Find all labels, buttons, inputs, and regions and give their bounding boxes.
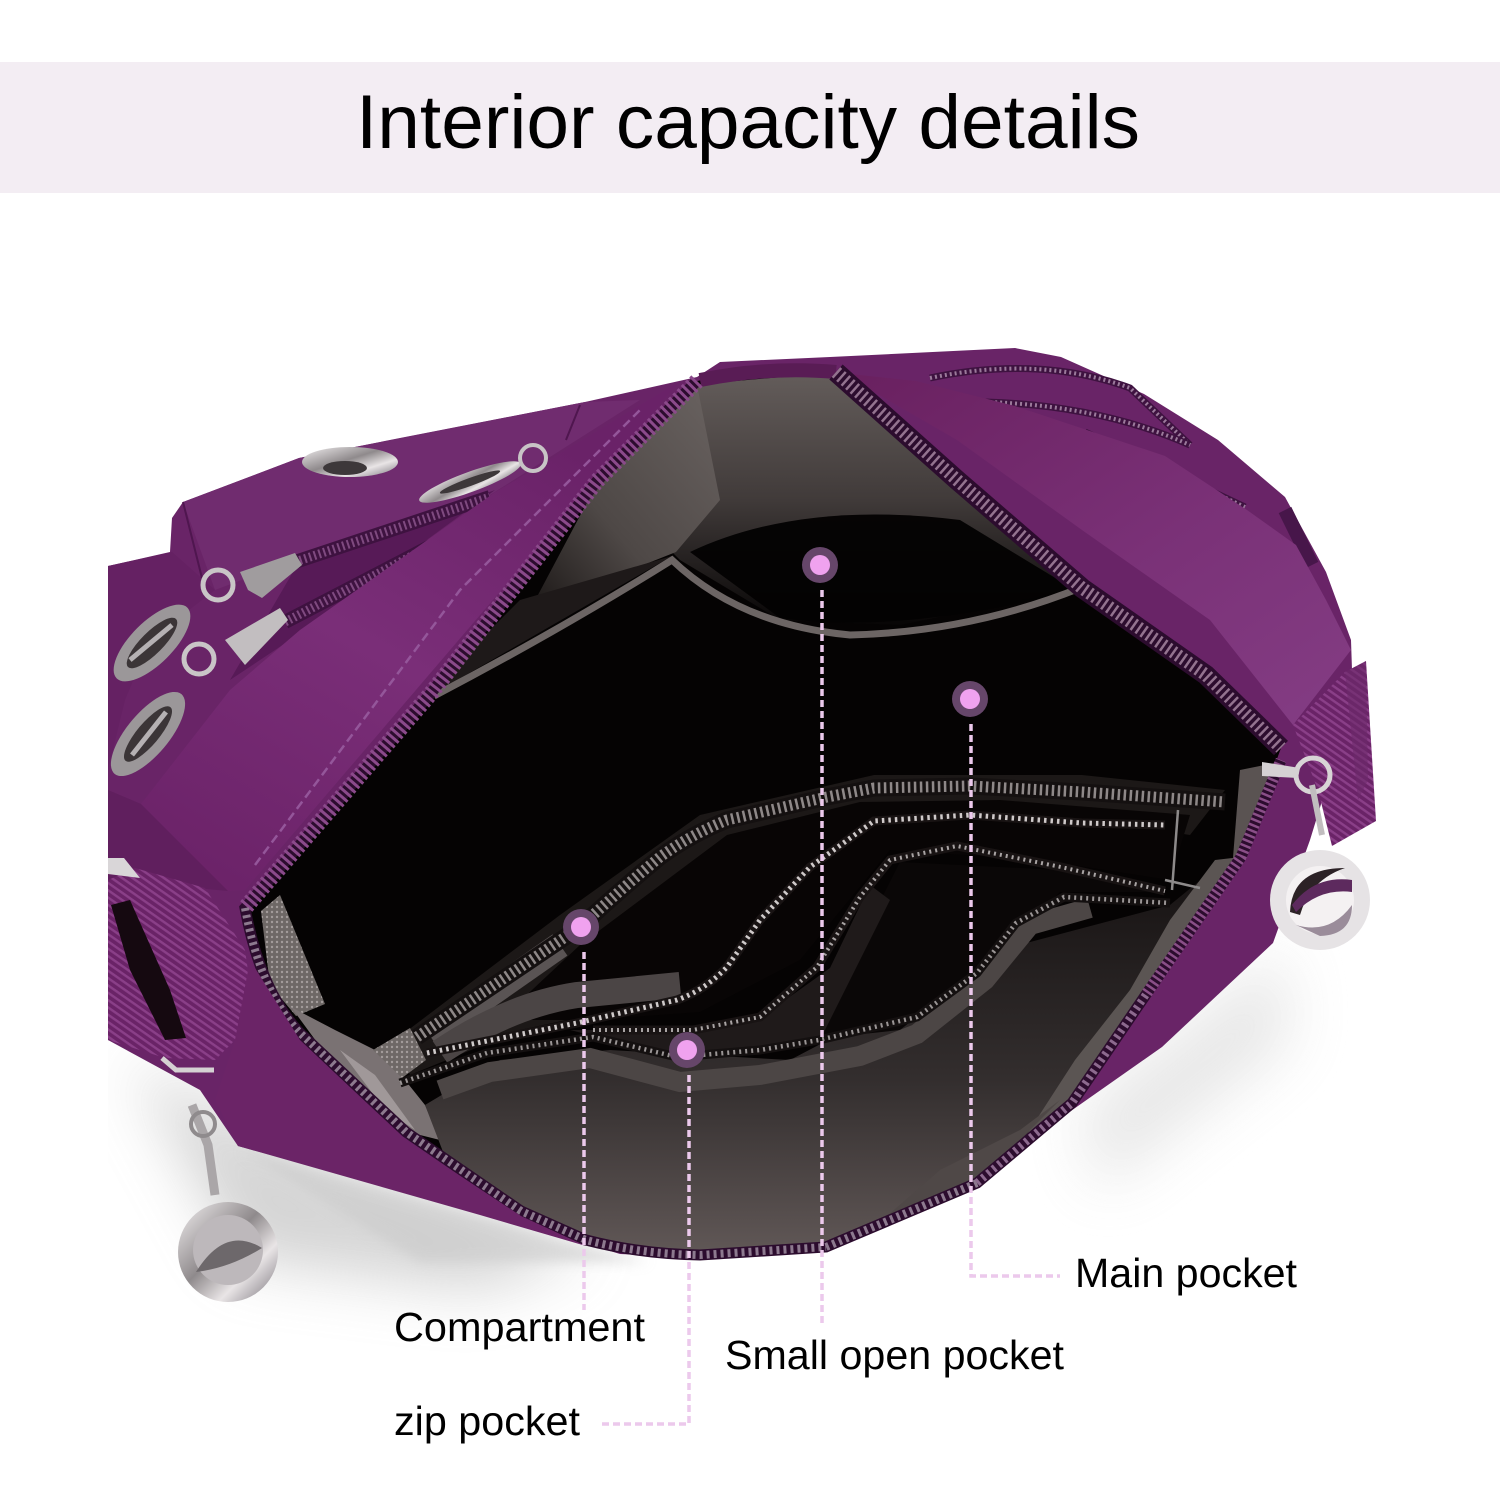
label: compartment: Compartment (394, 1304, 646, 1350)
left strap (108, 868, 255, 1060)
hanging charm right (1262, 758, 1370, 950)
mesh gusset (373, 1028, 426, 1078)
top rim band (700, 370, 836, 380)
hanging charm lower left (178, 1105, 278, 1302)
title banner (0, 62, 1500, 193)
label: zip pocket: zip pocket (394, 1398, 581, 1444)
left mesh corner (261, 895, 325, 1016)
ground shadow (130, 950, 1290, 1290)
lower lining (425, 882, 1198, 1250)
d-ring lower left (162, 1058, 214, 1070)
bag body silhouette (108, 348, 1353, 1258)
title: Interior capacity details (356, 80, 1140, 165)
annotation: main pocket (952, 681, 1060, 1276)
back left panel (108, 402, 585, 680)
lower right strap (1293, 661, 1376, 846)
annotation: zip pocket (598, 1032, 705, 1424)
front zips left (285, 497, 500, 622)
annotation: compartment (563, 909, 599, 1310)
lower left purple body (108, 790, 228, 891)
right back panel zips (930, 369, 1312, 565)
annotation: small open pocket (802, 547, 838, 1326)
main zipper around opening (245, 372, 1281, 1255)
grey crinkled lining lower left (291, 1007, 440, 1140)
inner zips (400, 786, 1225, 1090)
lower left fabric (215, 960, 586, 1246)
mid pocket dark fabric (395, 775, 1225, 1075)
side ring left (108, 858, 140, 878)
label: main pocket: Main pocket (1075, 1250, 1298, 1296)
interior (251, 377, 1281, 1250)
oval zip pull top (416, 445, 546, 510)
upper lining (673, 377, 1054, 612)
right front flap (984, 398, 1351, 725)
metal snap (302, 447, 398, 477)
bag photo illustration (98, 340, 1376, 1424)
small open pocket edge (434, 560, 1080, 696)
zip pull left lower (110, 608, 288, 776)
zip pull left upper (114, 553, 302, 682)
right lining fold (1028, 858, 1233, 1132)
left front flap (190, 496, 524, 812)
label: small open pocket: Small open pocket (725, 1332, 1065, 1378)
